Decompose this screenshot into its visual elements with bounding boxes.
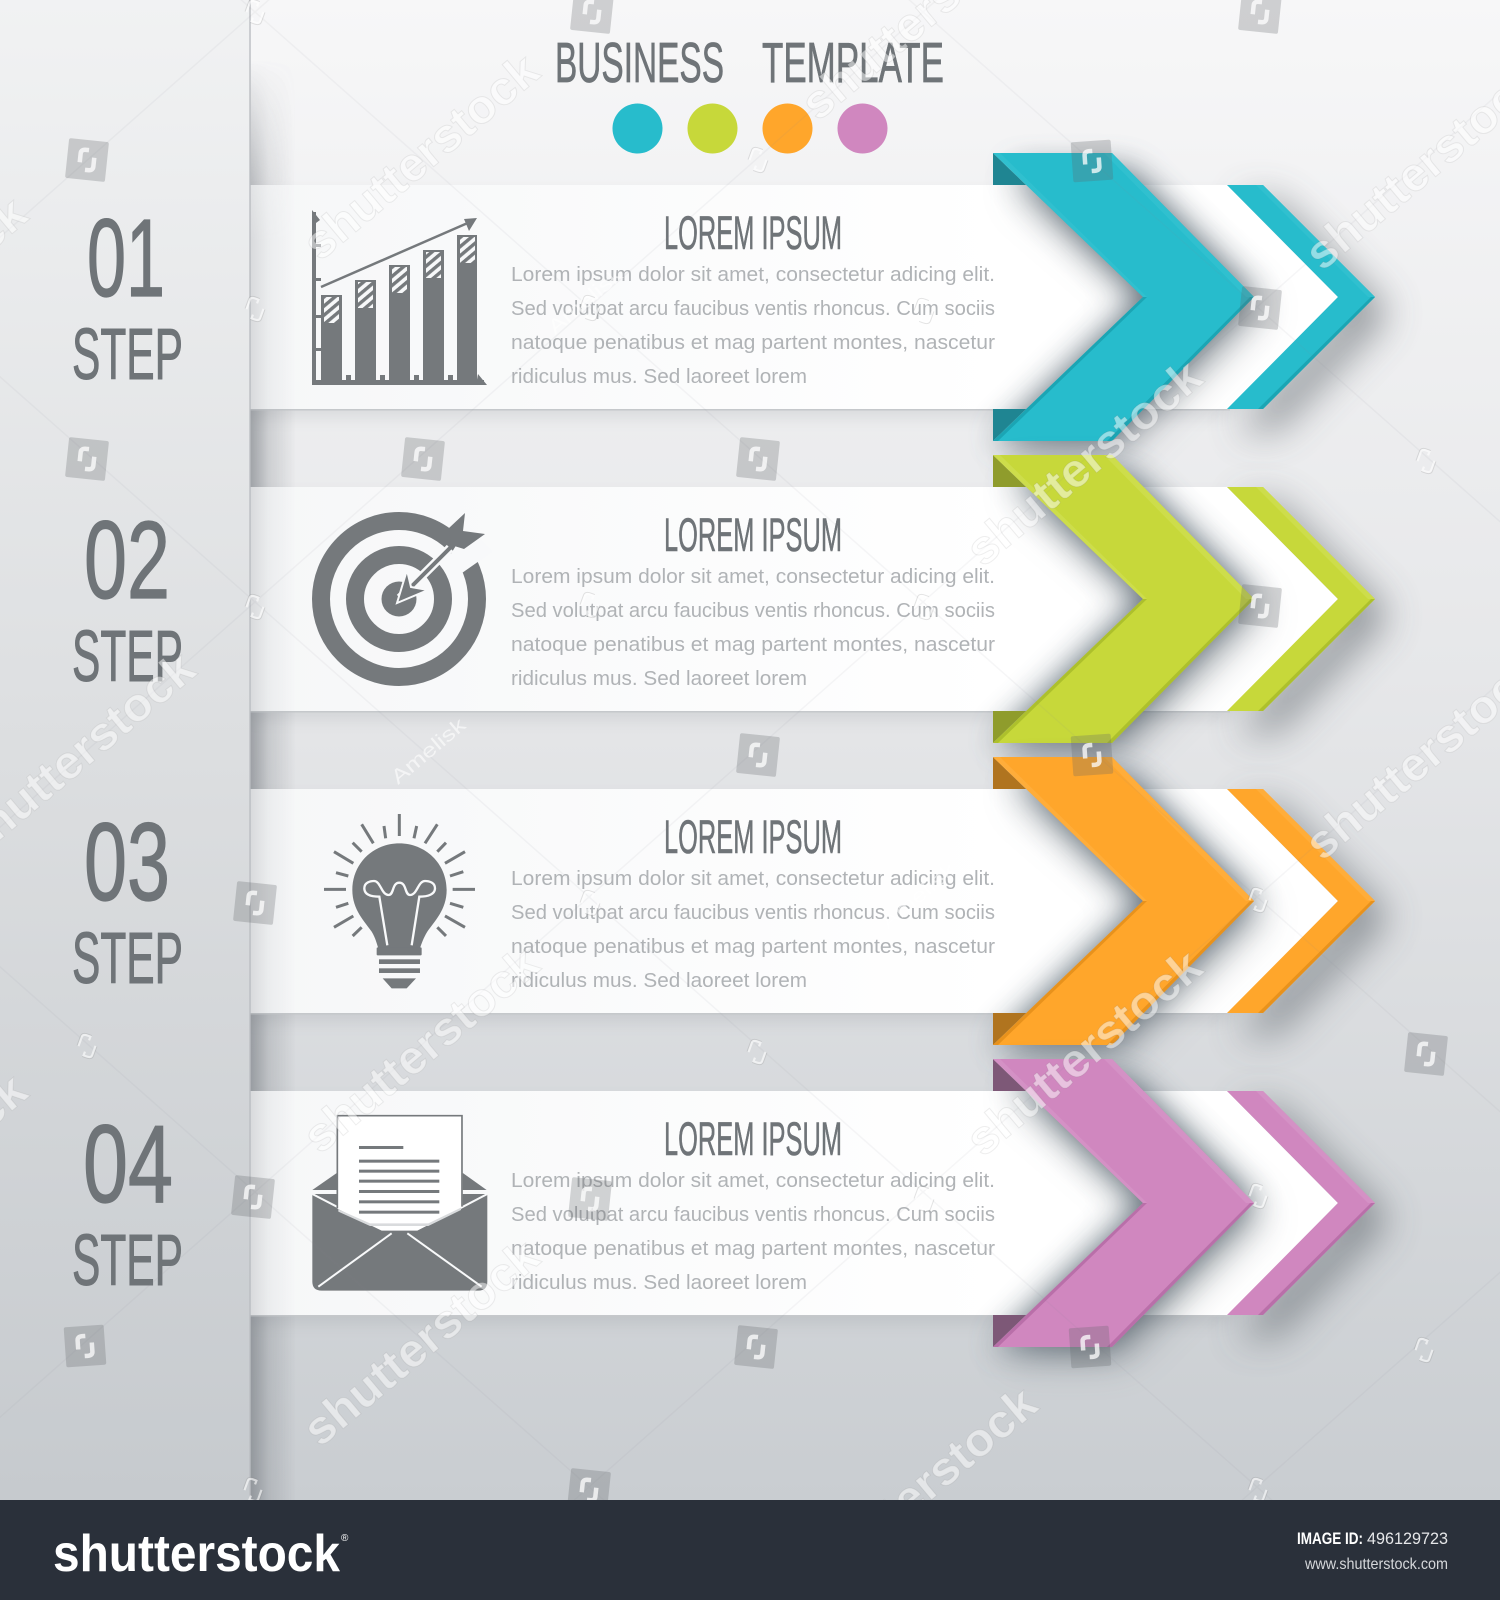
step 04 label: [72, 1103, 183, 1301]
main chevron: [993, 757, 1254, 1045]
footer bar: [0, 1500, 1500, 1600]
band shadow: [258, 711, 1234, 721]
body text: Lorem ipsum dolor sit amet, consectetur adicing elit.: [511, 1170, 995, 1192]
main chevron shadow: [993, 1075, 1266, 1359]
body text: ridiculus mus. Sed laoreet lorem: [511, 366, 807, 388]
watermark text: shutterstock: [955, 348, 1212, 576]
watermark text: shutterstock: [790, 1375, 1047, 1600]
step 01 label: [72, 197, 183, 395]
folds: [993, 757, 1026, 1045]
watermark text: Amelisk: [387, 713, 471, 789]
heading: LOREM IPSUM: [664, 810, 842, 863]
body text: Sed volutpat arcu faucibus ventis rhoncus. Cum sociis: [511, 1204, 995, 1226]
registered mark: ®: [341, 1533, 349, 1544]
panel: step 4 row: [250, 1059, 1387, 1359]
body text: Sed volutpat arcu faucibus ventis rhoncus. Cum sociis: [511, 902, 995, 924]
body text: natoque penatibus et mag partent montes, nascetur: [511, 332, 995, 354]
main chevron shadow: [993, 773, 1266, 1057]
heading: LOREM IPSUM: [664, 508, 842, 561]
band edge: [250, 1315, 1230, 1316]
title: TEMPLATE: [762, 31, 944, 95]
watermark text: shutterstock: [292, 42, 549, 270]
title: BUSINESS: [555, 31, 724, 95]
rear chevron shadow: [1239, 503, 1387, 731]
heading: LOREM IPSUM: [664, 1112, 842, 1165]
step 01 label: 01: [87, 197, 165, 320]
step 03 label: [72, 801, 183, 999]
main chevron shadow: [993, 471, 1266, 755]
image id: IMAGE ID:: [1297, 1529, 1363, 1548]
main chevron: [993, 455, 1254, 743]
step 01 label: STEP: [72, 315, 183, 395]
rear chevron shadow: [1239, 1107, 1387, 1335]
left panel shadow: [250, 82, 286, 1500]
watermark text: shutterstock: [955, 938, 1212, 1166]
panel: step 1 row: [250, 153, 1387, 453]
body text: [511, 264, 995, 388]
band edge: [250, 409, 1230, 410]
website: www.shutterstock.com: [1304, 1556, 1448, 1573]
main chevron shadow: [993, 169, 1266, 453]
footer logo: shutterstock: [53, 1525, 340, 1583]
folds: [993, 455, 1026, 743]
panel: step 2 row: [250, 455, 1387, 755]
panel: step 3 row: [250, 757, 1387, 1057]
rear chevron: [1227, 789, 1375, 1013]
icon: light bulb: [324, 814, 475, 988]
white arrow band: [250, 789, 1338, 1014]
main chevron: [993, 1059, 1254, 1347]
body text: Lorem ipsum dolor sit amet, consectetur adicing elit.: [511, 868, 995, 890]
icon: target with arrow: [321, 513, 492, 677]
body text: Sed volutpat arcu faucibus ventis rhoncus. Cum sociis: [511, 298, 995, 320]
band shadow: [261, 1013, 1235, 1022]
step 03 label: 03: [84, 801, 170, 924]
body text: ridiculus mus. Sed laoreet lorem: [511, 970, 807, 992]
body text: Sed volutpat arcu faucibus ventis rhoncus. Cum sociis: [511, 600, 995, 622]
watermark text: Amelisk: [544, 263, 628, 339]
watermark text: Amelisk: [877, 858, 961, 934]
folds: [993, 153, 1026, 441]
white arrow band: [250, 185, 1338, 410]
body text: natoque penatibus et mag partent montes, nascetur: [511, 936, 995, 958]
body text: [511, 868, 995, 992]
image id: [1297, 1529, 1448, 1548]
band edge: [250, 711, 1230, 712]
step 02 label: 02: [84, 499, 170, 622]
step 04 label: 04: [83, 1103, 173, 1226]
watermark text: shutterstock: [292, 935, 549, 1163]
step 02 label: [72, 499, 183, 697]
body text: ridiculus mus. Sed laoreet lorem: [511, 668, 807, 690]
heading: LOREM IPSUM: [664, 206, 842, 259]
folds: [993, 1059, 1026, 1347]
body text: ridiculus mus. Sed laoreet lorem: [511, 1272, 807, 1294]
band shadow: [258, 409, 1237, 419]
band shadow: [262, 1315, 1234, 1323]
panel: left step column: [0, 0, 251, 1500]
main chevron: [993, 153, 1254, 441]
body text: natoque penatibus et mag partent montes, nascetur: [511, 634, 995, 656]
image id: 496129723: [1367, 1529, 1448, 1548]
body text: [511, 566, 995, 690]
icon: envelope with letter: [312, 1115, 487, 1291]
body text: Lorem ipsum dolor sit amet, consectetur adicing elit.: [511, 264, 995, 286]
body text: [511, 1170, 995, 1294]
step 03 label: STEP: [72, 919, 183, 999]
rear chevron: [1227, 487, 1375, 711]
white arrow band: [250, 487, 1338, 712]
rear chevron shadow: [1239, 805, 1387, 1033]
rear chevron: [1227, 185, 1375, 409]
icon: bar chart: [312, 210, 487, 385]
watermark text: shutterstock: [292, 1228, 549, 1456]
colour dots: [612, 104, 888, 154]
body text: natoque penatibus et mag partent montes, nascetur: [511, 1238, 995, 1260]
band edge: [250, 1013, 1230, 1014]
white arrow band: [250, 1091, 1338, 1316]
rear chevron: [1227, 1091, 1375, 1315]
step 04 label: STEP: [72, 1221, 183, 1301]
rear chevron shadow: [1239, 201, 1387, 429]
body text: Lorem ipsum dolor sit amet, consectetur adicing elit.: [511, 566, 995, 588]
left wall shadow over bands: [250, 122, 276, 1500]
step 02 label: STEP: [72, 617, 183, 697]
